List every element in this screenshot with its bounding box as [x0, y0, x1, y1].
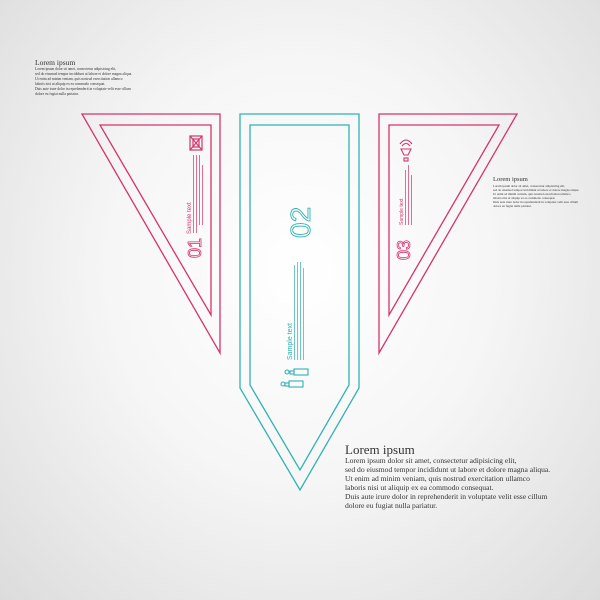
panel: 03 right triangle [379, 114, 517, 353]
label: 01 sample text: Sample text [187, 202, 193, 234]
text block: top left: Lorem ipsum [35, 58, 75, 67]
icon: megaphone [400, 140, 412, 161]
icon: envelope [190, 136, 202, 150]
text block: top left: laboris nisi ut aliquip ex ea commodo consequat. [35, 82, 105, 86]
text block: top left [35, 58, 132, 96]
text block: bottom right: Ut enim ad minim veniam, quis nostrud exercitation ullamco [345, 474, 530, 483]
panel: 02 middle arrow [240, 114, 359, 490]
panel: 02 middle arrow: Sample text [287, 323, 294, 360]
text block: right: dolore eu fugiat nulla pariatur. [493, 204, 532, 208]
text block: top left: Ut enim ad minim veniam, quis nostrud exercitation ullamco [35, 77, 123, 81]
text block: bottom right: Lorem ipsum [345, 442, 415, 457]
text block: top left: dolore eu fugiat nulla pariatur. [35, 92, 79, 96]
text block: right: Lorem ipsum dolor sit amet, consectetur adipisicing elit, [493, 184, 565, 188]
panel: 01 left triangle [82, 114, 220, 353]
label: 02 sample text: 02 [285, 207, 316, 238]
text block: right: laboris nisi ut aliquip ex ea commodo consequat. [493, 196, 555, 200]
text block: bottom right [345, 442, 550, 510]
icon: people [281, 369, 308, 387]
label: 01 sample text: 01 [185, 238, 205, 258]
text block: right: Ut enim ad minim veniam, quis nostrud exercitation ullamco [493, 192, 571, 196]
text block: right: sed do eiusmod tempor incididunt ut labore et dolore magna aliqua. [493, 188, 579, 192]
text block: bottom right: Lorem ipsum dolor sit amet, consectetur adipisicing elit, [345, 456, 516, 465]
text block: right: Duis aute irure dolor in reprehenderit in voluptate velit esse cillum [493, 200, 578, 204]
label: 01 sample text [185, 155, 205, 258]
text block: right: Lorem ipsum [493, 176, 528, 183]
label: 03 sample text: 03 [394, 240, 414, 260]
panel: 03 right triangle: Sample text [399, 198, 405, 225]
text block: right [493, 176, 579, 208]
text block: top left: Lorem ipsum dolor sit amet, consectetur adipisicing elit, [35, 67, 116, 71]
text block: bottom right: dolore eu fugiat nulla pariatur. [345, 501, 437, 510]
text block: bottom right: sed do eiusmod tempor incididunt ut labore et dolore magna aliqua. [345, 465, 550, 474]
text block: top left: Duis aute irure dolor in reprehenderit in voluptate velit esse cillum [35, 87, 131, 91]
text block: top left: sed do eiusmod tempor incididunt ut labore et dolore magna aliqua. [35, 72, 132, 76]
text block: bottom right: Duis aute irure dolor in reprehenderit in voluptate velit esse cillum [345, 492, 547, 501]
text block: bottom right: laboris nisi ut aliquip ex ea commodo consequat. [345, 483, 493, 492]
